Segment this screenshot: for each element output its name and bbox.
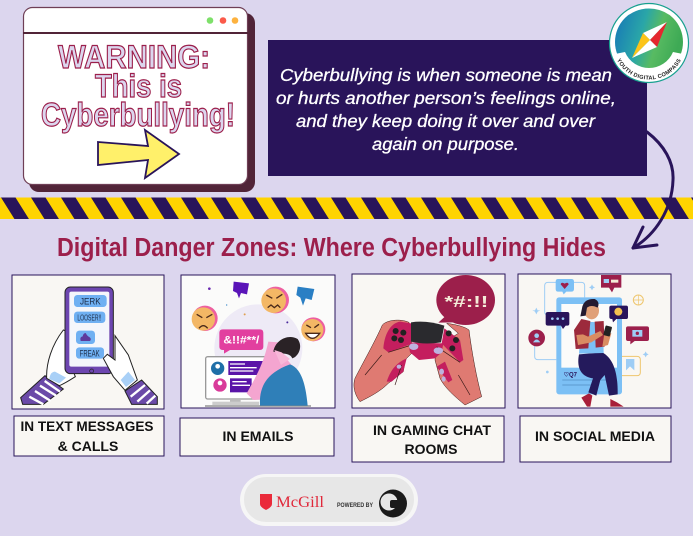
- window shadow: [29, 13, 255, 192]
- controller: [383, 322, 463, 382]
- yellow arrow: [98, 130, 179, 178]
- label: social media: [520, 416, 671, 462]
- thumbs down icons: [233, 282, 314, 306]
- window header line: [23, 32, 248, 34]
- confetti dots: [208, 287, 288, 323]
- label: gaming: IN GAMING CHAT: [373, 422, 491, 438]
- label: social media: IN SOCIAL MEDIA: [535, 428, 655, 444]
- compass needle: [632, 22, 667, 58]
- compass face: [615, 8, 683, 76]
- label: emails: [180, 418, 334, 456]
- illustration: hands holding phone: [21, 287, 157, 404]
- label: gaming: ROOMS: [405, 441, 457, 457]
- inner arc: [629, 8, 669, 14]
- left sleeve: [21, 376, 63, 404]
- label: emails: IN EMAILS: [222, 428, 294, 444]
- panel: social media: [518, 274, 671, 408]
- definition text: Cyberbullying is when someone is mean: [280, 65, 612, 85]
- definition text: or hurts another person’s feelings online,: [276, 88, 616, 108]
- label: gaming: [352, 416, 504, 462]
- left hand: [47, 330, 75, 386]
- logo: Youth Digital Compass: [608, 2, 690, 84]
- window control dots: [207, 17, 238, 24]
- phone frame: ♡Q7: [564, 372, 578, 379]
- warning title: Cyberbullying!: [41, 96, 235, 133]
- illustration: hands holding controller: [354, 275, 495, 405]
- chat bubbles: [74, 295, 107, 359]
- speech bubble: &!!#**/: [223, 335, 259, 347]
- halo: [214, 304, 302, 392]
- connector lines: [535, 282, 640, 376]
- warning window: [23, 8, 255, 192]
- ring band: [615, 52, 683, 76]
- woman: [574, 299, 624, 407]
- angry emojis: [192, 287, 325, 341]
- label: text messages: & CALLS: [58, 438, 118, 454]
- label: text messages: [14, 416, 164, 456]
- definition box: [268, 40, 647, 176]
- left hand: [354, 320, 418, 402]
- warning title: [41, 39, 235, 133]
- label: text messages: IN TEXT MESSAGES: [20, 418, 154, 434]
- chat bubbles: LOOSER!!: [77, 313, 101, 322]
- illustration: woman using social media: [528, 275, 649, 407]
- phone: [65, 287, 113, 374]
- definition text: [276, 65, 616, 154]
- ring label: YOUTH DIGITAL COMPASS: [618, 58, 680, 80]
- profile icon: [528, 330, 545, 346]
- panel: gaming: [352, 274, 505, 408]
- McGill shield: [260, 494, 272, 510]
- right hand: [103, 336, 137, 390]
- warning title: This is: [95, 68, 182, 104]
- sparkles: [532, 284, 649, 373]
- footer logo pill: [240, 474, 418, 526]
- thumb nails and finger lines: [365, 343, 470, 395]
- definition text: and they keep doing it over and over: [296, 111, 596, 131]
- right hand shading: [121, 372, 135, 387]
- person: [247, 337, 308, 406]
- right hand: [435, 323, 482, 405]
- speech bubble: [436, 275, 495, 325]
- McGill wordmark: McGill: [276, 494, 325, 511]
- chat bubbles: JERK: [80, 296, 101, 306]
- speech bubble: *#:!!: [444, 294, 488, 311]
- powered by: POWERED BY: [337, 502, 374, 509]
- social bubbles: [546, 275, 649, 344]
- window frame: [24, 8, 248, 184]
- chat bubbles: FREAK: [80, 349, 100, 359]
- partner badge: [379, 490, 407, 518]
- caution tape: [0, 198, 693, 219]
- bookmark and globe icons: [626, 295, 643, 370]
- definition text: again on purpose.: [372, 134, 519, 154]
- curved arrow: [633, 132, 673, 248]
- right sleeve: [125, 380, 157, 404]
- monitor: [205, 357, 311, 407]
- panel: text messages: [12, 275, 164, 409]
- panel: emails: [181, 275, 335, 408]
- heading: Digital Danger Zones: Where Cyberbullying Hides: [57, 234, 606, 262]
- left hand shading: [49, 372, 66, 383]
- warning title: WARNING:: [58, 39, 210, 75]
- illustration: upset person at computer: [192, 282, 325, 407]
